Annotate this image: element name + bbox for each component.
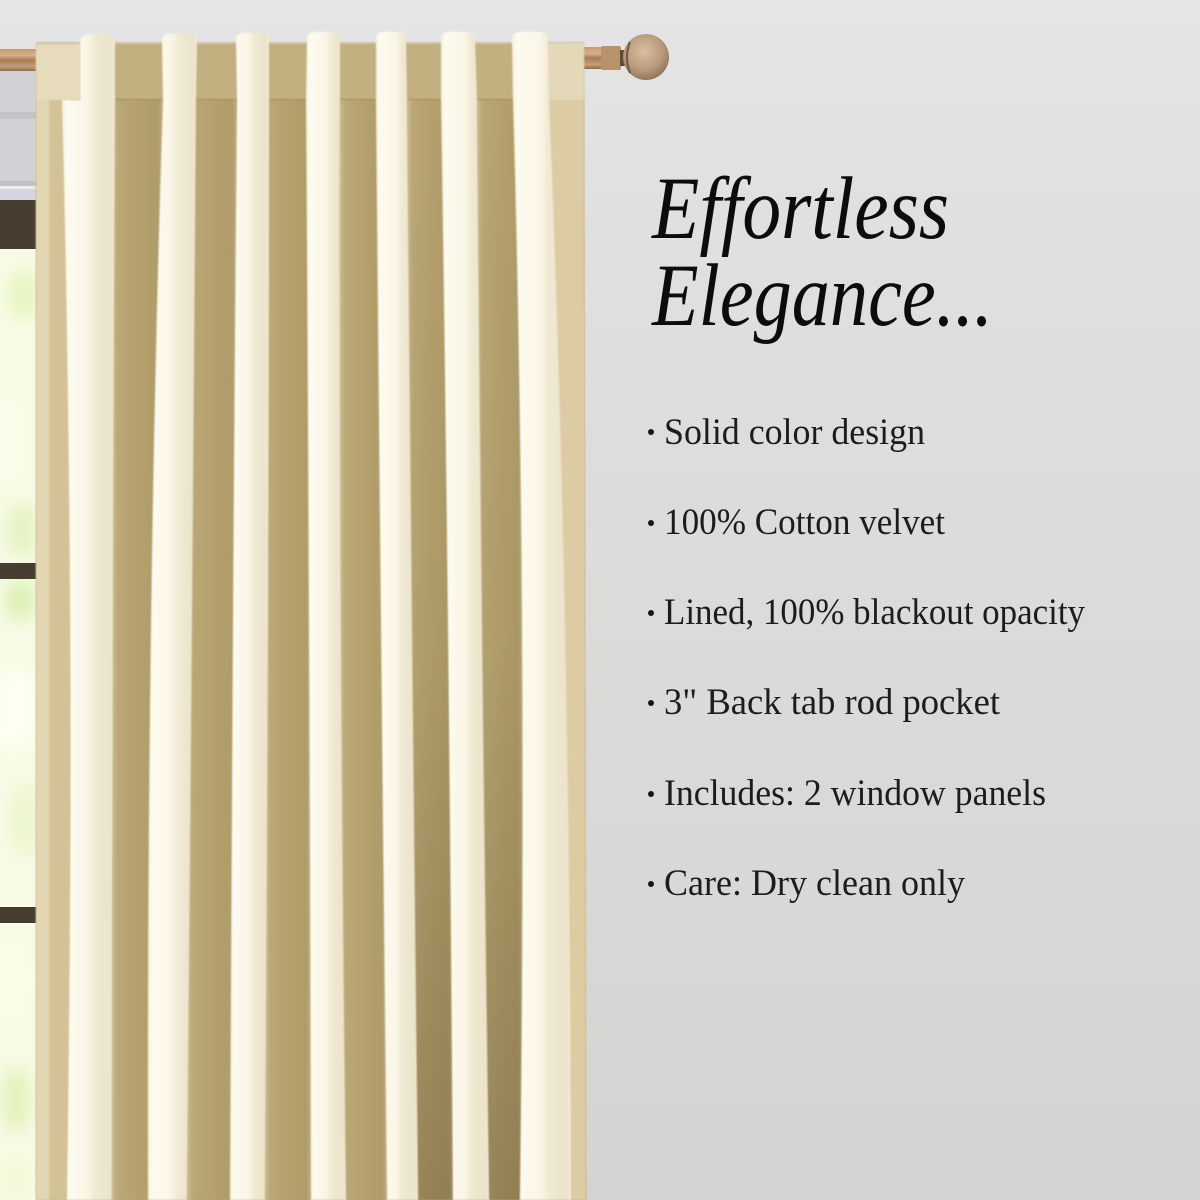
heading (650, 160, 993, 345)
window mullion upper (0, 563, 37, 579)
curtain rod left (0, 49, 37, 71)
right hem (545, 42, 586, 1200)
window trim moulding (0, 71, 37, 200)
feature: cotton velvet: 100% Cotton velvet (664, 502, 946, 543)
dark window head (0, 200, 37, 249)
fold 4 (306, 32, 346, 1200)
fold 5 (376, 32, 418, 1200)
feature: care: Care: Dry clean only (664, 863, 965, 904)
curtain base fabric (36, 42, 586, 1200)
curtain rod right with finial (583, 34, 669, 80)
feature: blackout lining: Lined, 100% blackout opacity (664, 592, 1085, 633)
heading: Effortless (650, 160, 949, 258)
fold 3 (230, 33, 269, 1200)
heading: Elegance... (650, 247, 993, 345)
curtain panel (36, 32, 586, 1200)
fold 2 (148, 34, 197, 1200)
fold 1 (62, 34, 115, 1200)
garden view through window (0, 249, 40, 1200)
feature: includes panels: Includes: 2 window panels (664, 773, 1046, 814)
window mullion lower (0, 907, 37, 923)
feature: solid color: Solid color design (664, 412, 925, 453)
cream folds with back tabs (62, 32, 571, 1200)
trough shades (112, 100, 523, 1200)
left hem (36, 44, 80, 1200)
fold 6 (441, 32, 489, 1200)
feature list (648, 412, 1085, 904)
fold 7 (512, 32, 571, 1200)
window frame and view (0, 71, 40, 1200)
feature: back tab rod pocket: 3" Back tab rod pocket (664, 682, 1001, 723)
